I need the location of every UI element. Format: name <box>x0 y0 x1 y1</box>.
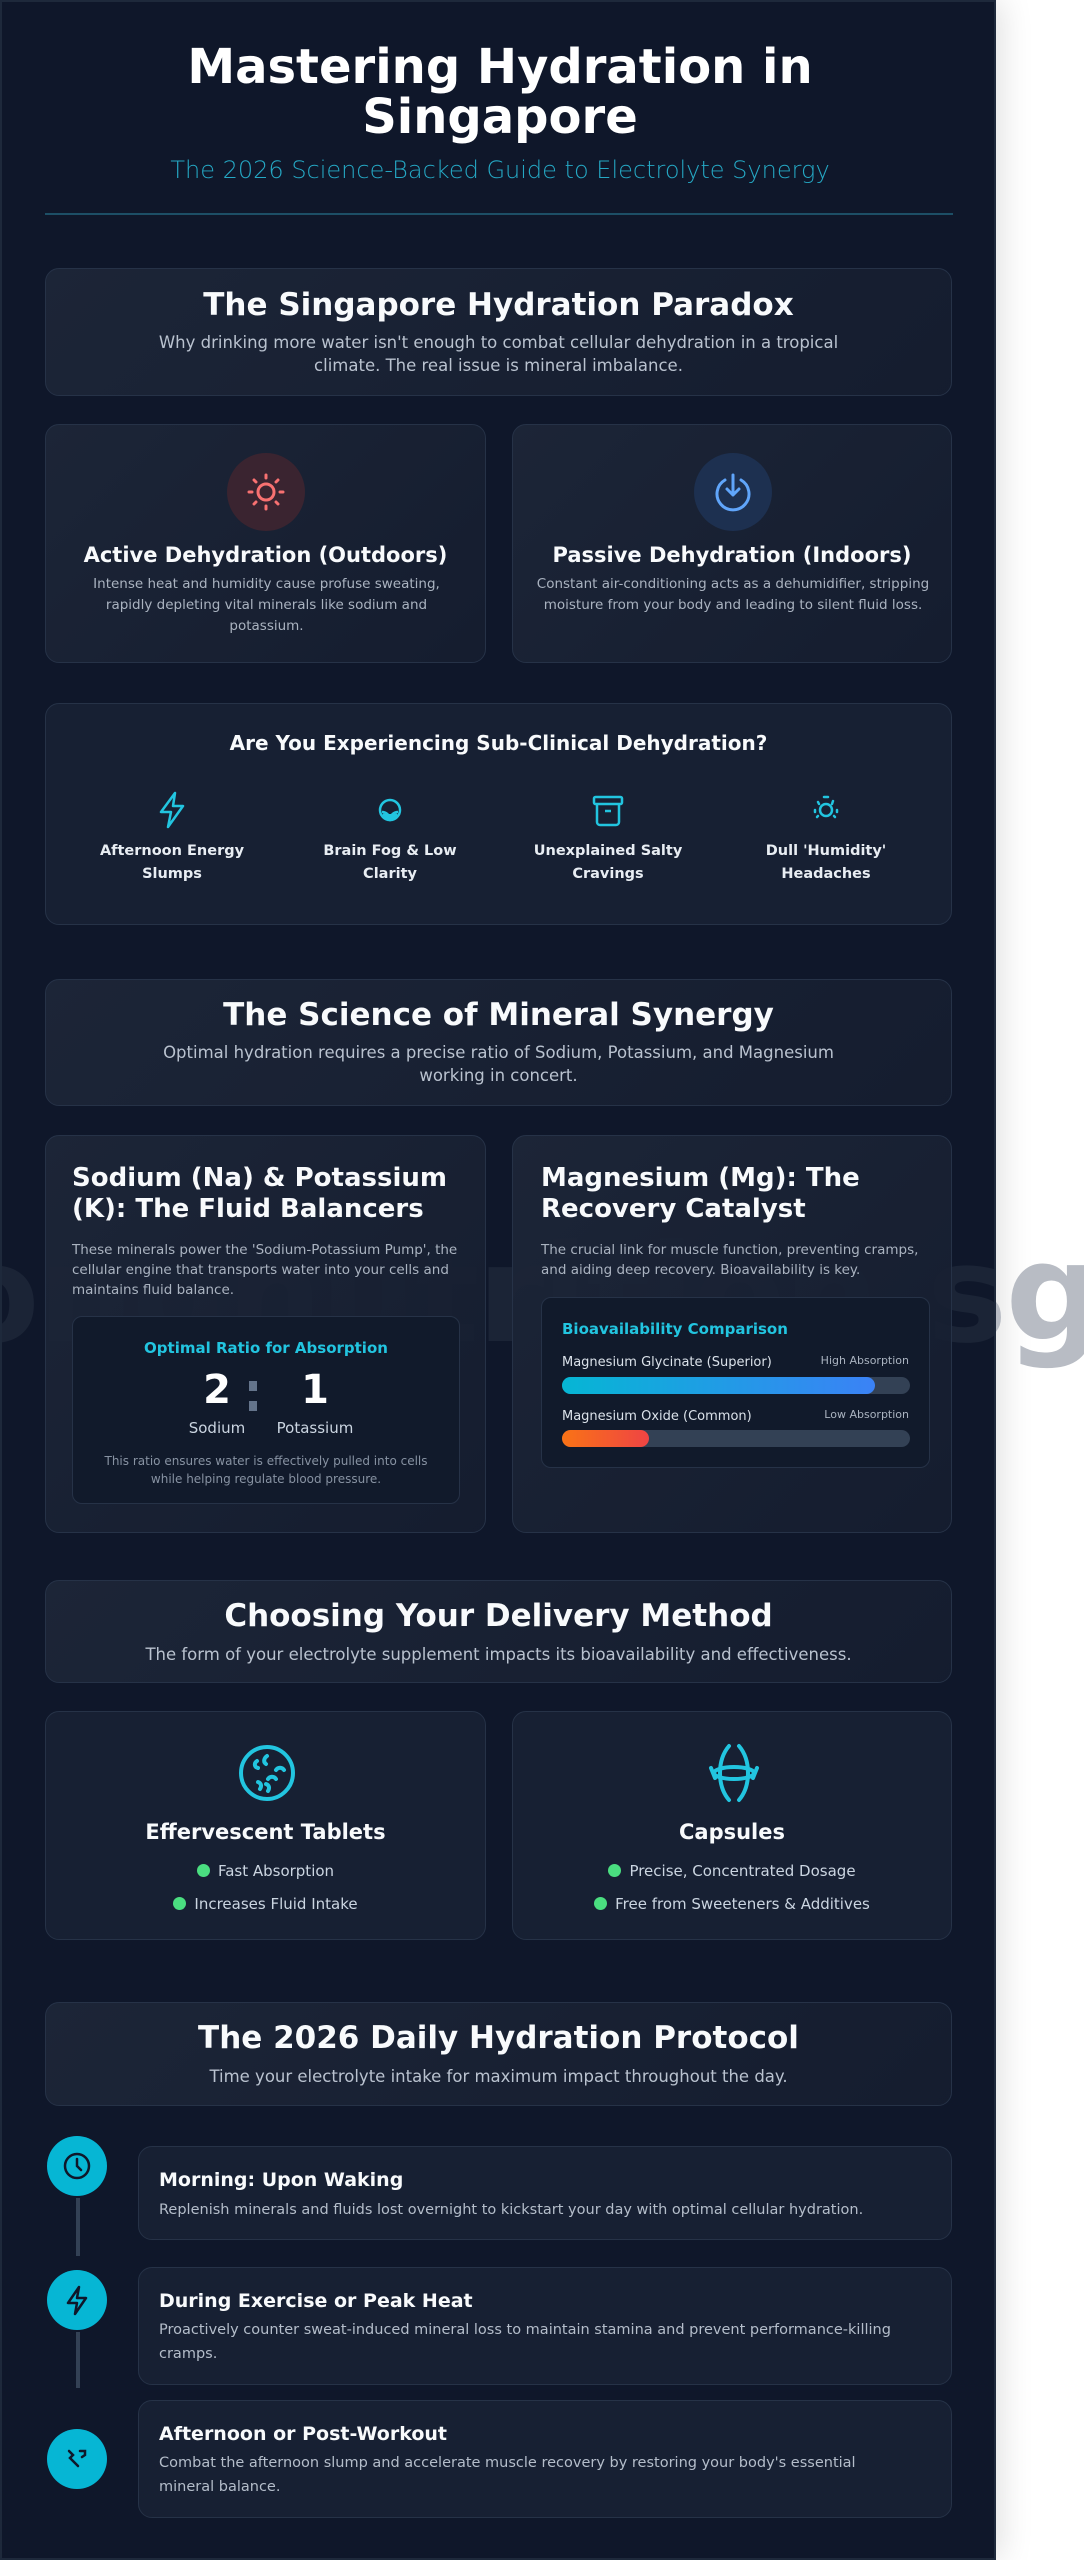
heading: Active Dehydration (Outdoors) <box>84 543 447 567</box>
list: Precise, Concentrated Dosage <box>629 1862 856 1880</box>
panel: symptoms <box>45 703 952 925</box>
symptom: salty cravings: Cravings <box>572 866 644 882</box>
heading: The Singapore Hydration Paradox <box>203 287 794 323</box>
heading: Sodium (Na) & Potassium (K): The Fluid Balancers <box>72 1163 447 1224</box>
step: exercise <box>138 2267 952 2385</box>
text block: Why drinking more water isn't enough to combat cellular dehydration in a tropical climate. The real issue is mineral imbalance. <box>159 333 838 375</box>
panel: capsules <box>512 1711 952 1940</box>
bar chart: bioavailability: Magnesium Glycinate (Superior) <box>562 1355 772 1370</box>
list: Free from Sweeteners & Additives <box>615 1895 870 1913</box>
icon: download circle <box>694 453 772 531</box>
symptom: energy: Afternoon Energy <box>100 843 244 859</box>
symptom: salty cravings: Unexplained Salty <box>534 843 682 859</box>
list: Fast Absorption <box>218 1862 334 1880</box>
symptom: energy: Slumps <box>142 866 202 882</box>
text block: Time your electrolyte intake for maximum impact throughout the day. <box>209 2067 788 2086</box>
bar chart: bioavailability: High Absorption <box>821 1354 909 1367</box>
text block: The form of your electrolyte supplement impacts its bioavailability and effectiveness. <box>145 1645 852 1664</box>
ratio numbers: Sodium <box>189 1419 245 1437</box>
symptom: headaches: Dull 'Humidity' <box>766 843 886 859</box>
step: exercise: During Exercise or Peak Heat <box>159 2290 473 2312</box>
text block: Constant air-conditioning acts as a dehumidifier, stripping moisture from your body and leading to silent fluid loss. <box>537 576 929 613</box>
step: morning: Replenish minerals and fluids lost overnight to kickstart your day with optimal cellular hydration. <box>159 2202 863 2218</box>
list: Increases Fluid Intake <box>194 1895 358 1913</box>
heading: Capsules <box>679 1820 785 1844</box>
icon: tablet <box>239 1745 295 1801</box>
panel: science header <box>45 979 952 1106</box>
heading: The Science of Mineral Synergy <box>223 997 774 1033</box>
icon: clock <box>47 2136 107 2196</box>
icon: recovery <box>47 2429 107 2489</box>
step: morning <box>138 2146 952 2240</box>
list <box>594 1862 870 1913</box>
icon: sun <box>227 453 305 531</box>
text block: These minerals power the 'Sodium-Potassium Pump', the cellular engine that transports water into your cells and maintains fluid balance. <box>72 1242 457 1298</box>
symptom: brain fog: Brain Fog & Low <box>323 843 457 859</box>
heading: The 2026 Daily Hydration Protocol <box>198 2020 799 2056</box>
step: morning: Morning: Upon Waking <box>159 2169 403 2191</box>
ratio title: Optimal Ratio for Absorption <box>144 1339 388 1357</box>
panel: effervescent tablets <box>45 1711 486 1940</box>
bar chart: bioavailability: Low Absorption <box>824 1408 909 1421</box>
bar chart: bioavailability: Magnesium Oxide (Common) <box>562 1409 752 1424</box>
symptom: salty cravings <box>534 796 682 882</box>
text block: The crucial link for muscle function, preventing cramps, and aiding deep recovery. Bioavailability is key. <box>541 1242 918 1278</box>
panel: protocol header <box>45 2002 952 2106</box>
panel: magnesium <box>512 1135 952 1533</box>
ratio numbers: Potassium <box>277 1419 353 1437</box>
panel: delivery header <box>45 1580 952 1683</box>
ratio note: This ratio ensures water is effectively pulled into cells while helping regulate blood pressure. <box>104 1454 428 1486</box>
title: Singapore <box>362 89 638 145</box>
icon: bolt <box>160 792 184 828</box>
step: afternoon <box>138 2400 952 2518</box>
icon: jar <box>592 796 624 826</box>
ratio numbers: 1 <box>301 1367 329 1413</box>
icon: brain <box>378 798 402 822</box>
symptom: brain fog: Clarity <box>363 866 417 882</box>
heading: Effervescent Tablets <box>145 1820 386 1844</box>
step: afternoon: Combat the afternoon slump and accelerate muscle recovery by restoring your body's essential mineral balance. <box>159 2455 856 2495</box>
symptom: energy <box>100 792 244 882</box>
ratio numbers: 2 <box>203 1367 231 1413</box>
heading: Choosing Your Delivery Method <box>224 1598 773 1634</box>
title: Mastering Hydration in <box>187 39 813 95</box>
text block: Intense heat and humidity cause profuse sweating, rapidly depleting vital minerals like sodium and potassium. <box>93 576 440 634</box>
ratio box <box>72 1316 460 1504</box>
heading: Passive Dehydration (Indoors) <box>553 543 911 567</box>
symptom: headaches: Headaches <box>781 866 871 882</box>
panel: sodium potassium <box>45 1135 486 1533</box>
ratio numbers <box>189 1367 353 1437</box>
bar chart: bioavailability <box>541 1297 930 1468</box>
icon: headache <box>814 796 838 818</box>
symptom: headaches <box>766 796 886 882</box>
icon: bolt <box>47 2270 107 2330</box>
subtitle: The 2026 Science-Backed Guide to Electrolyte Synergy <box>170 156 830 184</box>
heading: Magnesium (Mg): The Recovery Catalyst <box>541 1163 860 1224</box>
bar chart: bioavailability: Bioavailability Comparison <box>562 1320 788 1338</box>
list <box>173 1862 358 1913</box>
step: exercise: Proactively counter sweat-induced mineral loss to maintain stamina and prevent performance-killing cramps. <box>159 2322 891 2362</box>
step: afternoon: Afternoon or Post-Workout <box>159 2423 447 2445</box>
title <box>187 39 813 145</box>
text block: Optimal hydration requires a precise ratio of Sodium, Potassium, and Magnesium working in concert. <box>163 1043 834 1085</box>
panel: active dehydration <box>45 424 486 663</box>
heading: Are You Experiencing Sub-Clinical Dehydration? <box>230 731 767 755</box>
icon: capsule <box>708 1744 760 1802</box>
panel: hydration paradox header <box>45 268 952 396</box>
symptom: brain fog <box>323 798 457 882</box>
panel: passive dehydration <box>512 424 952 663</box>
